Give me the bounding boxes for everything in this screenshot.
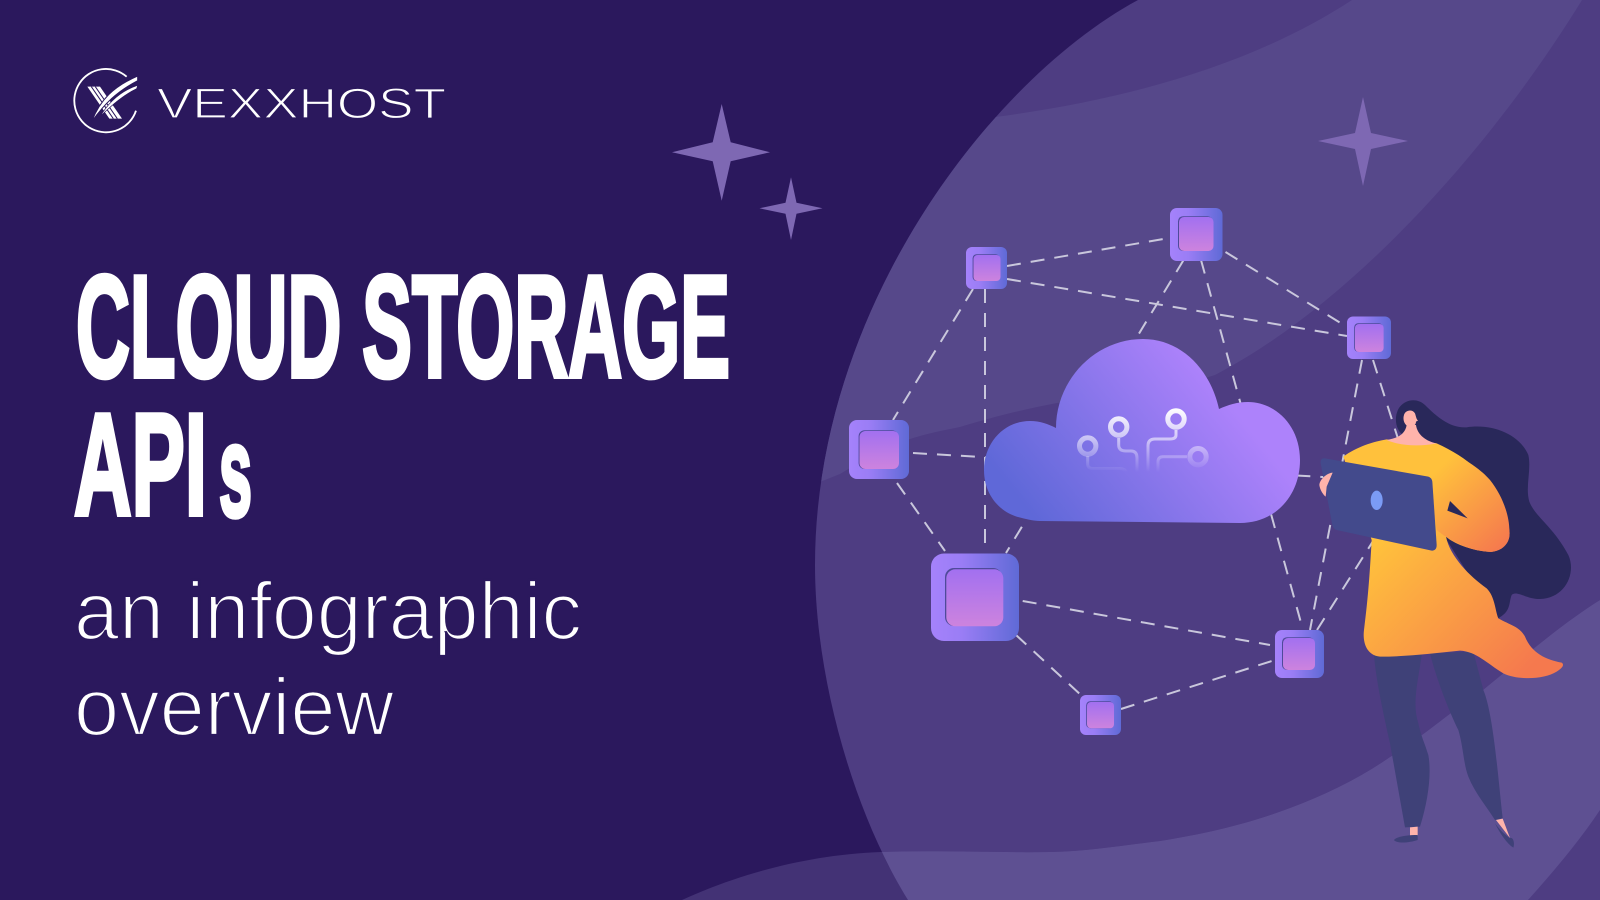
subtitle: overview — [74, 662, 395, 753]
star: small — [760, 177, 822, 240]
node: large — [931, 554, 1019, 641]
arm gap — [1447, 501, 1468, 518]
node: top left — [966, 247, 1007, 289]
network connections — [893, 238, 1400, 709]
bottom wave inside — [882, 600, 1600, 900]
icon: circuit traces — [1080, 411, 1206, 473]
dress — [1343, 439, 1563, 678]
cloud — [984, 339, 1300, 523]
node: bottom — [1080, 695, 1121, 735]
tablet camera — [1371, 491, 1383, 510]
arm — [1423, 443, 1510, 552]
hair — [1396, 400, 1571, 619]
tablet — [1321, 458, 1437, 551]
title — [74, 246, 730, 546]
hand — [1319, 473, 1333, 497]
logo: Vexxhost — [74, 69, 446, 132]
node: left — [849, 420, 909, 479]
subtitle — [74, 566, 582, 753]
icon: logo mark — [74, 69, 138, 132]
node: top — [1170, 208, 1222, 261]
logo wordmark: VEXXHOST — [157, 80, 446, 128]
face — [1403, 411, 1418, 427]
bottom wave outside — [682, 600, 1600, 900]
feet — [1394, 819, 1514, 848]
title: API — [74, 384, 207, 546]
title: CLOUD STORAGE — [76, 246, 730, 408]
star: right — [1318, 97, 1408, 186]
star: large — [672, 104, 770, 201]
node: lower right — [1275, 630, 1324, 678]
title: s — [219, 398, 252, 544]
subtitle: an infographic — [74, 566, 582, 657]
node: right — [1347, 316, 1391, 359]
person with tablet — [1319, 400, 1571, 848]
bottom right wedge — [1528, 810, 1600, 900]
large background curve shape — [815, 0, 1600, 900]
neck and chest — [1387, 425, 1437, 445]
lighter upper band — [800, 0, 1582, 490]
legs — [1374, 652, 1503, 827]
